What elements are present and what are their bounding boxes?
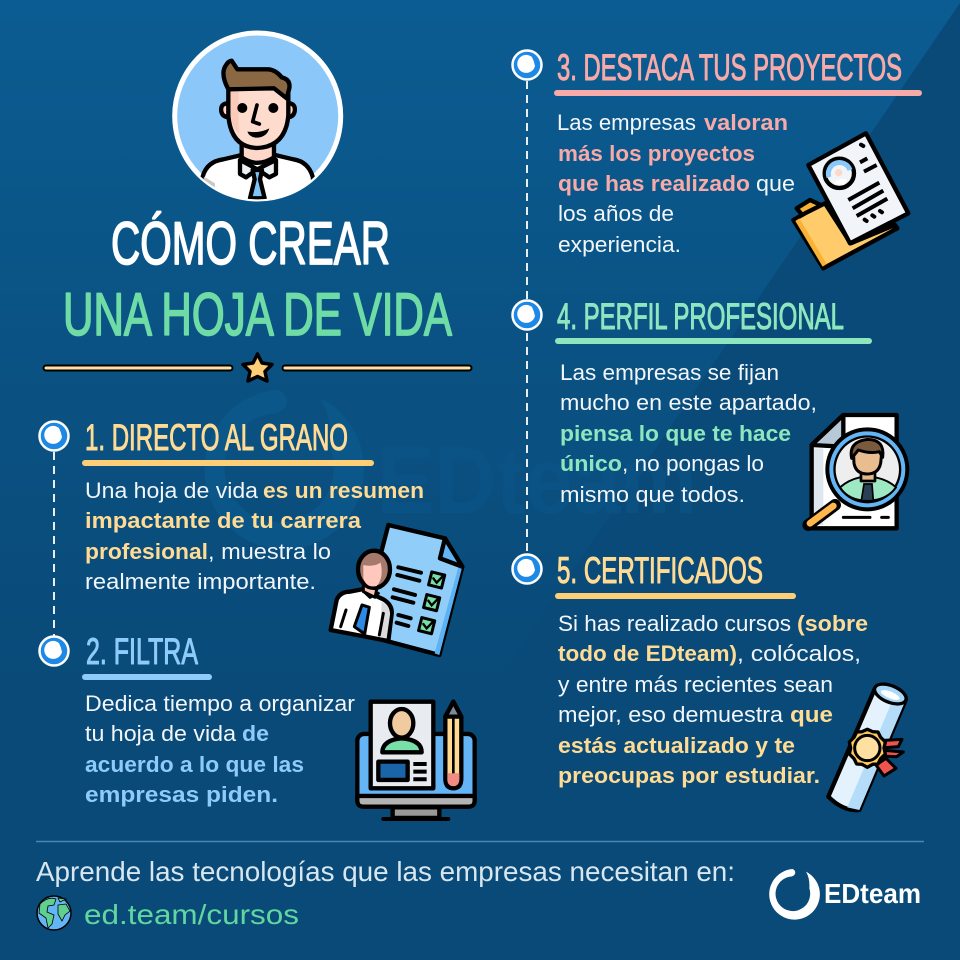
- body 5: que: [790, 702, 833, 727]
- body 4: Las empresas se fijan: [560, 360, 779, 385]
- underline 2: [82, 674, 212, 680]
- watermark logo: EDteam: [377, 427, 697, 534]
- body 5: mejor, eso demuestra: [558, 702, 784, 727]
- body 1: realmente importante.: [85, 569, 316, 594]
- title: UNA HOJA DE VIDA: [63, 281, 452, 348]
- body 3: los años de: [558, 201, 674, 226]
- avatar: [175, 33, 341, 207]
- marker 1: [40, 422, 68, 450]
- marker 2: [40, 636, 68, 666]
- footer link: ed.team/cursos: [84, 899, 299, 930]
- icon: monitor with resume and pencil: [357, 702, 475, 819]
- avatar ears: [221, 103, 295, 117]
- avatar collar: [240, 160, 276, 177]
- dashed timeline right: [526, 81, 528, 554]
- panel: step 5: [512, 550, 909, 810]
- avatar face: [228, 83, 288, 148]
- body 5: , colócalos,: [737, 641, 861, 666]
- avatar hair: [223, 61, 289, 98]
- body 3: [557, 110, 795, 257]
- body 4: único: [560, 451, 622, 476]
- marker 5: [512, 554, 542, 584]
- body 4: , no pongas lo: [622, 451, 764, 476]
- avatar neck: [242, 142, 274, 163]
- icon: folder with resume: [793, 133, 908, 268]
- body 5: [558, 611, 868, 788]
- logo ring: [769, 869, 820, 920]
- title: CÓMO CREAR: [111, 210, 390, 277]
- body 2: Dedica tiempo a organizar: [85, 691, 355, 716]
- dashed timeline left: [53, 452, 55, 636]
- body 2: empresas piden.: [85, 782, 278, 807]
- body 4: mucho en este apartado,: [560, 390, 817, 415]
- avatar mouth: [247, 128, 269, 138]
- heading 1: 1. DIRECTO AL GRANO: [85, 417, 348, 458]
- body 3: que has realizado: [558, 171, 750, 196]
- body 5: todo de EDteam): [558, 641, 737, 666]
- body 2: acuerdo a lo que las: [85, 752, 304, 777]
- icon: magnifier over profile: [808, 415, 909, 528]
- body 5: (sobre: [797, 611, 868, 636]
- body 3: valoran: [704, 110, 788, 135]
- footer rule: [36, 840, 924, 842]
- panel: step 2: [40, 631, 475, 819]
- body 4: [560, 360, 817, 507]
- avatar nose: [253, 105, 259, 124]
- panel: step 4: [512, 296, 909, 528]
- body 1: Una hoja de vida: [85, 478, 259, 503]
- body 3: más los proyectos: [558, 141, 755, 166]
- body 1: impactante de tu carrera: [85, 508, 362, 533]
- EDteam logo: [769, 869, 921, 920]
- heading 5: 5. CERTIFICADOS: [557, 550, 763, 591]
- underline 5: [555, 593, 796, 599]
- divider with star: [46, 354, 469, 381]
- marker 4: [512, 300, 542, 330]
- body 4: mismo que todos.: [560, 482, 745, 507]
- avatar shirt: [200, 153, 315, 196]
- body 5: y entre más recientes sean: [558, 672, 833, 697]
- body 5: preocupas por estudiar.: [558, 763, 820, 788]
- icon: diploma scroll with seal: [828, 680, 909, 810]
- body 1: , muestra lo: [208, 539, 331, 564]
- body 4: piensa lo que te hace: [560, 421, 791, 446]
- body 2: de: [242, 721, 269, 746]
- body 3: que: [756, 171, 795, 196]
- heading 2: 2. FILTRA: [86, 631, 198, 672]
- body 1: profesional: [85, 539, 208, 564]
- footer call to action: Aprende las tecnologías que las empresas necesitan en:: [36, 856, 735, 887]
- icon: checklist with person: [331, 525, 462, 655]
- watermark logo: [205, 390, 697, 549]
- underline 3: [554, 90, 922, 96]
- icon: globe: [37, 896, 71, 930]
- title: [63, 210, 452, 348]
- logo wordmark: EDteam: [824, 878, 921, 909]
- panel: step 3: [512, 47, 922, 268]
- avatar tie: [250, 170, 265, 198]
- underline 4: [555, 338, 872, 344]
- marker 3: [512, 50, 542, 80]
- body 3: Las empresas: [557, 110, 696, 135]
- body 5: Si has realizado cursos: [558, 611, 791, 636]
- body 3: experiencia.: [558, 232, 681, 257]
- avatar eyes: [237, 103, 247, 113]
- body 1: [85, 478, 424, 594]
- body 5: estás actualizado y te: [558, 733, 795, 758]
- panel: step 1: [40, 417, 462, 655]
- body 2: [85, 691, 355, 807]
- underline 1: [82, 460, 374, 466]
- body 2: tu hoja de vida: [85, 721, 237, 746]
- body 1: es un resumen: [263, 478, 424, 503]
